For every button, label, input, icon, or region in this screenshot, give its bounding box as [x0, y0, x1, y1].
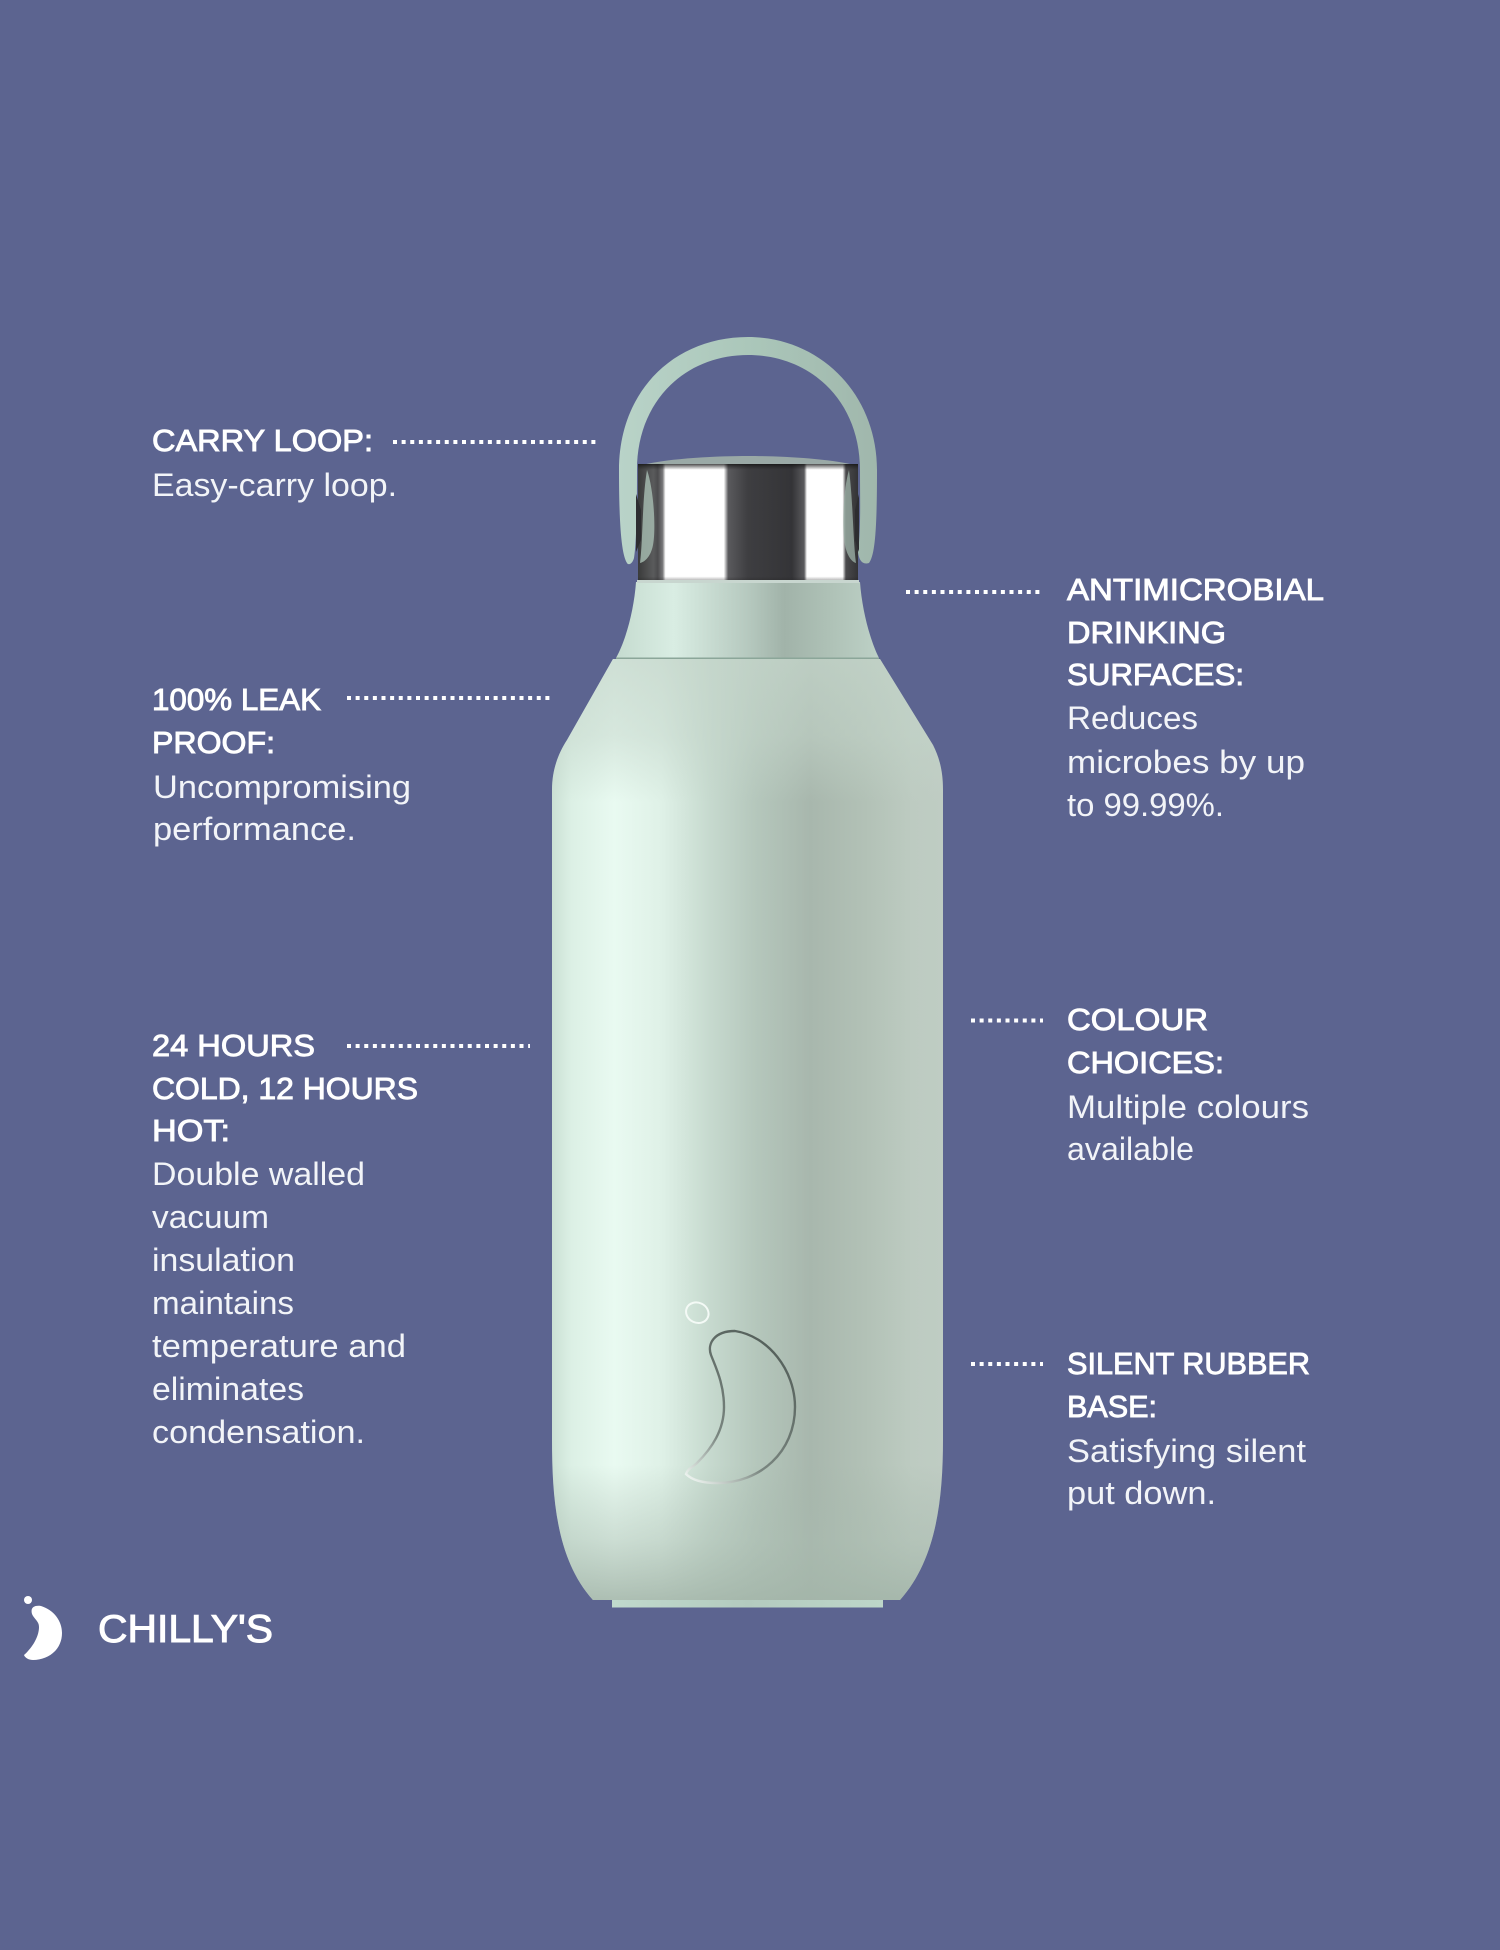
heading: 24 HOURS [152, 1028, 315, 1063]
leader line [971, 1018, 1043, 1022]
brand logo [24, 1596, 273, 1660]
heading: SURFACES: [1067, 657, 1244, 692]
bottle body [552, 659, 943, 1600]
description: Multiple colours [1067, 1089, 1309, 1125]
heading: DRINKING [1067, 615, 1226, 650]
description: insulation [152, 1242, 295, 1278]
description: put down. [1067, 1475, 1216, 1511]
callout: leak proof [152, 682, 554, 847]
description [1067, 700, 1305, 823]
embossed moon logo on bottle [683, 1299, 795, 1483]
collar [616, 580, 879, 659]
leader line [347, 696, 554, 700]
description: Reduces [1067, 700, 1198, 736]
leader line [971, 1362, 1043, 1366]
description: Satisfying silent [1067, 1433, 1306, 1469]
description: performance. [153, 811, 356, 847]
heading [1067, 1346, 1310, 1424]
description: Uncompromising [153, 769, 411, 805]
callout: insulation hours [152, 1028, 530, 1450]
heading [152, 1028, 418, 1148]
heading: COLOUR [1067, 1002, 1208, 1037]
leader line [906, 590, 1043, 594]
heading [1067, 572, 1324, 692]
heading: COLD, 12 HOURS [152, 1071, 418, 1106]
description: available [1067, 1131, 1194, 1167]
leader line [347, 1044, 530, 1048]
description [152, 1156, 406, 1450]
description: eliminates [152, 1371, 304, 1407]
description: to 99.99%. [1067, 787, 1224, 823]
description: temperature and [152, 1328, 406, 1364]
description: vacuum [152, 1199, 269, 1235]
description [1067, 1433, 1306, 1511]
heading: 100% LEAK [152, 682, 321, 717]
callout: silent rubber base [971, 1346, 1310, 1511]
heading: SILENT RUBBER [1067, 1346, 1310, 1381]
callout: carry loop [152, 423, 600, 503]
heading [1067, 1002, 1224, 1080]
heading: BASE: [1067, 1389, 1157, 1424]
leader line [393, 440, 600, 444]
carry loop handle [619, 337, 877, 564]
icon: moon and dot [24, 1596, 62, 1660]
heading: PROOF: [152, 725, 275, 760]
heading: HOT: [152, 1113, 230, 1148]
heading [152, 682, 321, 760]
callout: colour choices [971, 1002, 1309, 1167]
silent rubber base [612, 1600, 883, 1608]
steel cap [636, 464, 859, 580]
description: maintains [152, 1285, 294, 1321]
description: condensation. [152, 1414, 365, 1450]
description: Double walled [152, 1156, 365, 1192]
description: Easy-carry loop. [152, 467, 397, 503]
heading: ANTIMICROBIAL [1067, 572, 1324, 607]
bottle [552, 337, 943, 1608]
description [153, 769, 411, 847]
callout: antimicrobial surfaces [906, 572, 1324, 823]
description: microbes by up [1067, 744, 1305, 780]
heading: CARRY LOOP: [152, 423, 373, 458]
description [1067, 1089, 1309, 1167]
steel lid top [642, 456, 854, 465]
heading: CHOICES: [1067, 1045, 1224, 1080]
wordmark: CHILLY'S [98, 1608, 273, 1651]
